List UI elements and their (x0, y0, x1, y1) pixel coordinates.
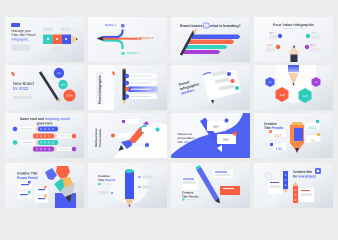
heading: Pencil (178, 80, 190, 87)
circle orange: 100% (66, 94, 73, 98)
heading: Creative (182, 190, 193, 194)
puzzle yellow (62, 177, 73, 188)
pencil tip (57, 98, 60, 102)
card teal (142, 127, 160, 132)
panel: manage your plan (5, 17, 84, 62)
white circle (110, 166, 148, 204)
card 2021: 2021 (308, 126, 316, 130)
pencil cone (56, 183, 75, 203)
teal marker (182, 198, 196, 200)
label: plan A: BigPlan A (105, 23, 117, 27)
card 3 (17, 191, 32, 198)
puzzle labels (43, 28, 71, 51)
blue value: 100 % (269, 32, 275, 34)
heading: Creative (98, 174, 110, 178)
teal value: 100 % (311, 32, 317, 34)
card left (268, 180, 283, 194)
panel: diagonal pencil (171, 163, 250, 208)
heading: Puzzle Pencil (17, 176, 38, 180)
heading: Title Pencils (264, 126, 283, 130)
pencil wood (192, 28, 197, 34)
card 4 (35, 195, 48, 202)
heading: Some cool and inspiring words (20, 117, 70, 121)
pencil (288, 65, 299, 86)
icon: orange badge (233, 132, 237, 136)
card 2 (35, 186, 48, 194)
panel: cool words (5, 113, 84, 158)
callout right top (138, 176, 153, 178)
pencil top (125, 169, 134, 173)
card top: 180+ (213, 126, 219, 128)
orange value: 100 % (267, 45, 273, 47)
pencil (288, 45, 299, 62)
card purple (121, 119, 139, 124)
panel: brand basics (171, 17, 250, 62)
badge (11, 23, 20, 27)
panel: pencil section (171, 65, 250, 110)
vertical title: Multipurpose (94, 128, 98, 147)
panel: new project (254, 163, 333, 208)
panel: pencil callouts (88, 163, 167, 208)
row purple (33, 146, 76, 152)
orange pencil (293, 181, 298, 203)
heading: Creative title (293, 170, 312, 174)
panel: hexagons (254, 65, 333, 110)
circle teal: 80% (61, 84, 65, 86)
card orange (111, 133, 130, 138)
row blue (212, 71, 231, 76)
label: plan B: BigPlan B (142, 36, 154, 40)
body text (12, 44, 30, 51)
pencil orange (129, 127, 143, 144)
row teal (13, 140, 58, 145)
callout left (99, 191, 113, 194)
card 99: 99 (311, 138, 316, 143)
card orange (220, 186, 240, 195)
heading: with vibrance (178, 140, 196, 144)
vertical title: Pencil Infographic (98, 75, 102, 104)
heading: goes here. (37, 122, 54, 126)
puzzle pencil (43, 34, 78, 44)
pencil body (196, 167, 219, 201)
pencil top accent (203, 73, 211, 75)
icon: logo (11, 72, 15, 76)
icon: blue target (121, 24, 124, 28)
heading: for 2023 (13, 86, 29, 91)
pencil body (125, 171, 134, 199)
hex purple: 140 (314, 82, 318, 84)
circle blue: 70% (57, 73, 61, 75)
pencil wood (125, 199, 134, 207)
blue branch arrow (103, 30, 122, 37)
blue block (55, 193, 76, 208)
pencil tip (96, 36, 103, 41)
pencil (122, 68, 126, 105)
teal branch arrow (103, 40, 122, 49)
pencil tip (211, 100, 214, 104)
row orange (215, 78, 234, 83)
pencil (40, 72, 58, 100)
heading: Creative (264, 122, 277, 126)
hex orange: 120 (279, 93, 285, 97)
soft circle (270, 196, 278, 204)
pencil lead (128, 205, 130, 207)
white backdrop (276, 65, 316, 103)
white pencil card (203, 70, 241, 103)
heading: presentation (178, 136, 195, 140)
card top (213, 170, 233, 178)
panel: four value (254, 17, 333, 62)
pencil (290, 122, 304, 153)
card 1 (18, 181, 32, 188)
icon: teal target (122, 52, 124, 55)
panel: pencil infographic list (88, 65, 167, 110)
heading: Creative Title (17, 172, 38, 176)
panel: stand new presentation (171, 113, 250, 158)
heading: for new project (293, 174, 316, 178)
row teal (219, 84, 239, 90)
vertical label card (96, 72, 102, 105)
card 150: 150 (276, 146, 283, 151)
heading: Title Pencils (98, 178, 115, 182)
icon: blue badge (224, 118, 228, 122)
panel: creative pencils stats (254, 113, 333, 158)
row blue (13, 126, 58, 132)
teal marker (98, 183, 112, 185)
pencil tip (118, 145, 124, 151)
pencil (181, 31, 194, 55)
list row 3 highlighted (125, 86, 158, 92)
orange branch arrow (103, 38, 138, 40)
card blue (132, 143, 149, 147)
panel: multipurpose (88, 113, 167, 158)
heading: Plan with Pencil (12, 33, 36, 37)
white wave (171, 113, 243, 155)
card left (182, 177, 198, 190)
list row 1 (125, 74, 157, 78)
ribbon blue (192, 34, 240, 39)
heading right: what is branding? (209, 24, 241, 28)
icon: check box (204, 23, 209, 28)
heading: Infographic (12, 37, 29, 41)
icon: ring (265, 172, 272, 180)
pencil purple end (143, 121, 149, 125)
heading: Title Pencils (182, 194, 199, 198)
heading: New Brand (13, 81, 34, 86)
ribbon teal (186, 45, 228, 49)
subtitle (284, 27, 303, 30)
ribbon purple (183, 50, 220, 54)
icon: blue badge (315, 168, 321, 174)
heading: section: (181, 88, 195, 96)
card 237: 237 (275, 133, 282, 138)
white side panel (88, 65, 114, 110)
icon: logo (112, 71, 115, 75)
hex teal: 120 (302, 94, 308, 98)
heading: Brand basics (180, 24, 203, 28)
pencil body (200, 118, 222, 149)
puzzle orange (56, 166, 70, 178)
pencil teal (140, 124, 147, 134)
panel: branching pencil (88, 17, 167, 62)
pencil tip (217, 145, 222, 152)
ribbon orange (189, 40, 234, 44)
blue pencil (283, 171, 288, 193)
heading: Four Value Infographic (273, 23, 314, 27)
hex blue: 50% (268, 82, 272, 84)
pencil blue (121, 140, 134, 149)
icon: orange target (138, 37, 142, 40)
body text (13, 96, 32, 99)
white curve (113, 123, 167, 158)
list row 4 (125, 94, 157, 99)
purple value: 100 % (310, 45, 316, 47)
pencil tip (215, 198, 220, 204)
pencil tip (65, 194, 72, 203)
heading: infographic (179, 82, 200, 91)
card right (299, 188, 314, 202)
heading: Stand new (178, 132, 192, 136)
pencil cap (196, 165, 201, 170)
heading: Manage your (12, 29, 31, 33)
callout right bottom (138, 186, 153, 188)
card bottom: 530+ (223, 138, 229, 142)
panel: new brand (5, 65, 84, 110)
label: plan C: BigPlan C (127, 51, 139, 55)
panel: puzzle pencil (5, 163, 84, 208)
puzzle teal (54, 178, 66, 192)
row orange (33, 134, 76, 138)
vertical title: Presentation. (98, 128, 102, 147)
list row 2 (125, 80, 157, 86)
puzzle purple (45, 168, 57, 180)
